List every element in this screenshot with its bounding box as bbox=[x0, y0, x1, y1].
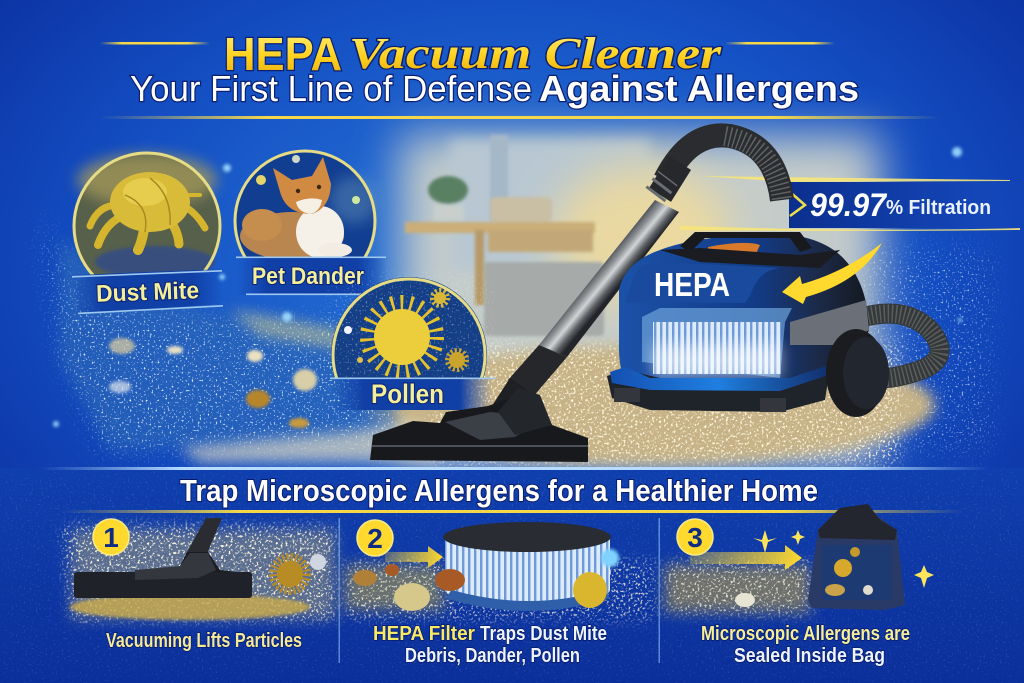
step 1 caption: Vacuuming Lifts Particles bbox=[106, 630, 302, 652]
room plant bbox=[428, 176, 468, 220]
pet dander label: Pet Dander bbox=[252, 263, 364, 290]
title line 1: HEPA bbox=[224, 28, 342, 80]
step 2 caption: Debris, Dander, Pollen bbox=[405, 645, 580, 667]
yellow arrow bbox=[782, 243, 882, 304]
HEPA filter bbox=[642, 308, 792, 378]
sparkles bbox=[753, 530, 934, 588]
badge 2: 2 bbox=[367, 523, 383, 554]
callout: 99.97% filtration bbox=[680, 176, 1024, 231]
badge 3: 3 bbox=[687, 522, 703, 553]
step 3 panel bbox=[665, 504, 934, 667]
step 2 caption bbox=[373, 623, 607, 667]
heading underline bbox=[60, 510, 965, 513]
badge 3 bbox=[677, 519, 713, 555]
callout: 99.97% filtration: % Filtration bbox=[886, 197, 991, 219]
callout: pet dander bbox=[234, 150, 387, 295]
top hose bbox=[665, 135, 782, 200]
handle bbox=[680, 232, 812, 252]
step 2 caption: Traps Dust Mite bbox=[480, 623, 607, 645]
pollen banner bbox=[332, 378, 492, 410]
section heading: Trap Microscopic Allergens for a Healthier Home bbox=[180, 473, 818, 508]
step 3 caption: Microscopic Allergens are bbox=[701, 623, 910, 645]
HEPA label: HEPA bbox=[654, 266, 730, 303]
callout: pollen bbox=[330, 275, 495, 433]
dust mite banner bbox=[72, 269, 222, 314]
pollen label: Pollen bbox=[371, 379, 444, 409]
wand connector bbox=[508, 345, 567, 398]
wand bbox=[539, 200, 679, 357]
step 3 image bbox=[665, 504, 934, 615]
step 1 panel bbox=[62, 518, 335, 652]
hero scene: room and carpet bbox=[365, 135, 935, 465]
badge 1: 1 bbox=[103, 522, 119, 553]
title line 2: Against Allergens bbox=[539, 68, 859, 109]
dust mite image bbox=[73, 152, 221, 300]
room table bbox=[405, 222, 595, 305]
wheel bbox=[826, 329, 886, 417]
silver band bbox=[790, 300, 869, 345]
step 2 image bbox=[345, 522, 655, 620]
cat image bbox=[236, 152, 379, 256]
vacuum body bbox=[619, 233, 869, 380]
title line 2: Your First Line of Defense bbox=[130, 68, 532, 109]
room sofa bbox=[484, 197, 604, 336]
HEPA panel bbox=[625, 262, 780, 303]
step 1 image bbox=[62, 518, 335, 620]
base bbox=[607, 368, 830, 412]
step 2 panel bbox=[345, 520, 655, 667]
vacuum cleaner bbox=[488, 135, 940, 425]
allergen bag bbox=[808, 504, 905, 610]
callout: dust mite bbox=[72, 152, 223, 314]
step 3 caption bbox=[701, 623, 910, 667]
filtration text: 99.97 bbox=[810, 187, 888, 223]
badge 1 bbox=[93, 519, 129, 555]
title decorative lines bbox=[100, 42, 835, 44]
title line 2 bbox=[130, 68, 859, 109]
lower section band bbox=[0, 468, 1024, 683]
title line 1 bbox=[224, 28, 722, 80]
step 2 caption: HEPA Filter bbox=[373, 623, 475, 645]
nozzle bbox=[370, 388, 588, 462]
arrow 3 bbox=[690, 545, 802, 570]
sparkle dust cloud left bbox=[40, 210, 440, 462]
pet dander banner bbox=[237, 257, 387, 295]
title bbox=[100, 28, 940, 119]
chevron bbox=[790, 192, 805, 216]
filter cartridge bbox=[445, 535, 610, 608]
title line 1: Vacuum Cleaner bbox=[349, 29, 722, 78]
dust mite label: Dust Mite bbox=[96, 277, 200, 308]
arrow 2 bbox=[385, 546, 443, 568]
pollen image bbox=[325, 270, 495, 378]
carpet bbox=[365, 345, 935, 465]
back hose bbox=[860, 314, 940, 378]
badge 2 bbox=[357, 520, 393, 556]
step 3 caption: Sealed Inside Bag bbox=[734, 645, 885, 667]
